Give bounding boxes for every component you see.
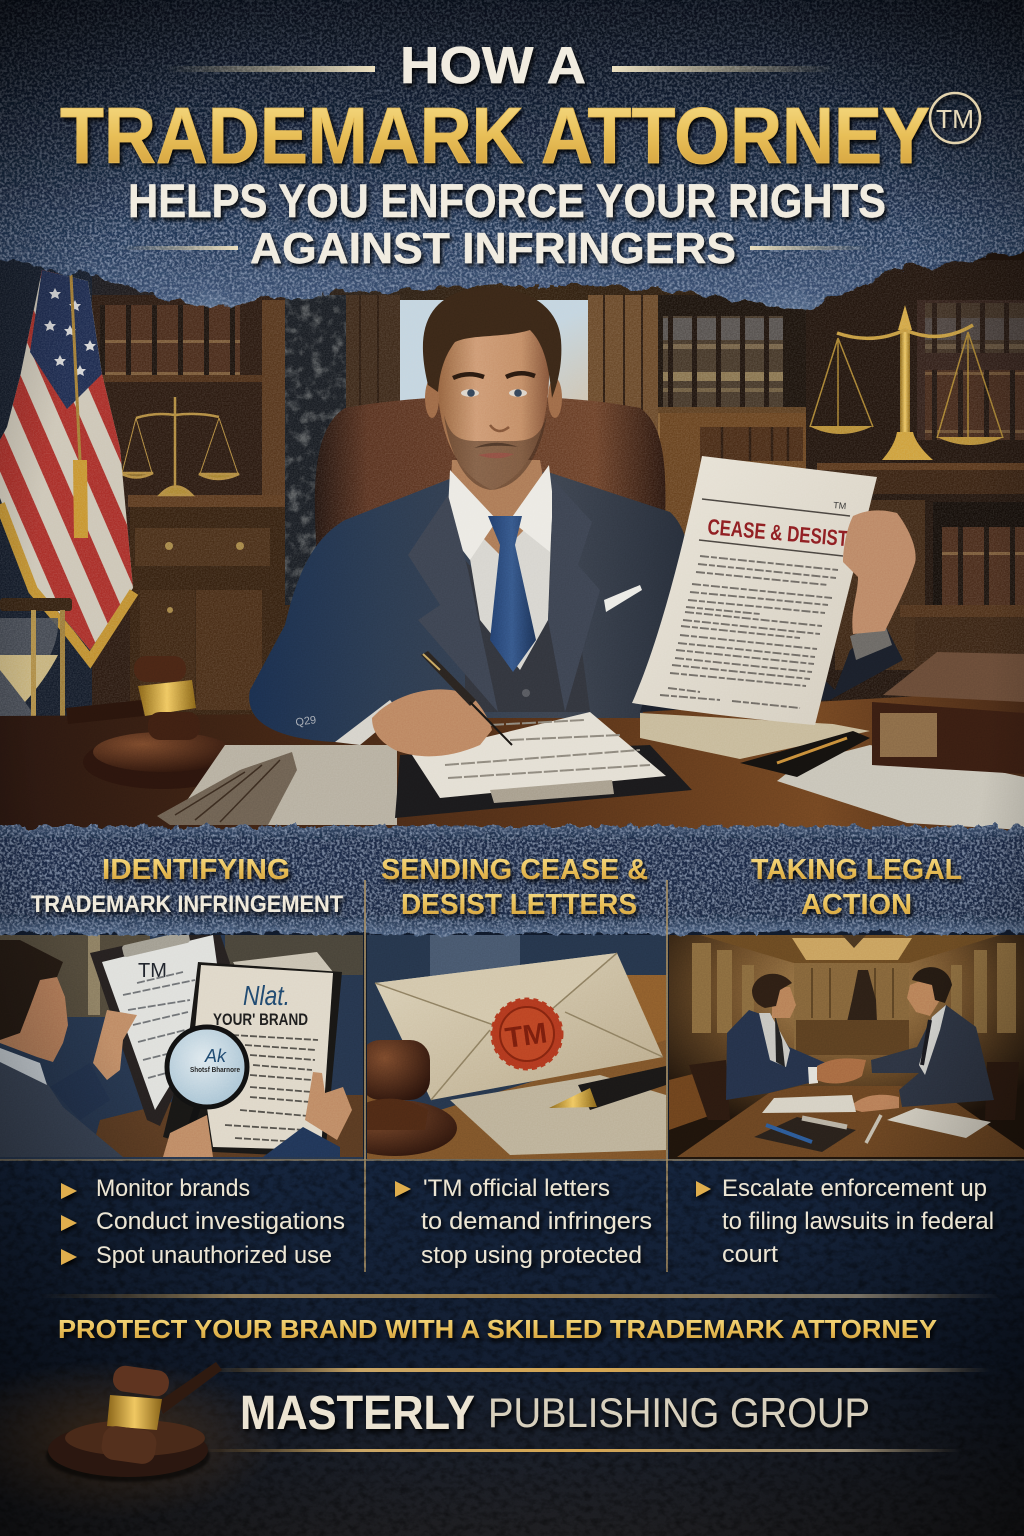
line one: 'TM official letters	[423, 1175, 610, 1202]
lower rule right	[750, 246, 868, 250]
flag tassel	[71, 275, 88, 538]
right bookcase	[806, 240, 1024, 720]
back sheet	[233, 952, 332, 972]
back wall panelling	[794, 963, 909, 1050]
man's hair	[0, 940, 63, 1040]
column heading: identifying trademark infringement	[31, 854, 343, 918]
heading line two: TRADEMARK INFRINGEMENT	[31, 891, 343, 918]
letter TM mark: TM	[833, 500, 847, 511]
clipboard	[395, 712, 692, 818]
line two: to filing lawsuits in federal	[722, 1208, 994, 1235]
hand holding letter	[843, 510, 916, 634]
document heading: YOUR' BRAND	[213, 1010, 308, 1029]
moustache	[474, 443, 518, 448]
right chair	[985, 1062, 1019, 1120]
chandelier	[842, 935, 866, 948]
bullet list: identifying	[61, 1175, 345, 1269]
your brand document	[163, 962, 342, 1157]
banner top shade	[0, 0, 1024, 235]
line one: Escalate enforcement up	[722, 1175, 987, 1202]
window	[398, 300, 590, 440]
flag fringe	[0, 504, 134, 660]
large gavel	[66, 656, 243, 789]
pen	[549, 1066, 666, 1110]
title line: trademark attorney: TRADEMARK ATTORNEY	[60, 91, 930, 180]
brand words: publishing group: PUBLISHING GROUP	[488, 1389, 870, 1436]
ears	[425, 378, 439, 418]
table papers	[762, 1095, 991, 1138]
left bookcase	[92, 295, 300, 715]
small brass scales	[120, 397, 239, 495]
upper rule right	[612, 66, 837, 72]
clipboard TM mark: TM	[138, 960, 167, 982]
lapels	[408, 478, 600, 712]
desk tray with pen	[754, 1117, 856, 1152]
magnified text: Shotsf Bharnore	[190, 1067, 240, 1074]
american flag	[0, 270, 138, 669]
judges bench	[796, 1020, 909, 1055]
pen	[421, 651, 512, 745]
line three: stop using protected	[421, 1242, 642, 1269]
neck	[450, 460, 548, 555]
right hand and sleeve	[263, 1072, 352, 1157]
panel 1 illustration: identifying infringement	[0, 925, 363, 1160]
mouth	[478, 453, 514, 458]
bullet one: Monitor brands	[96, 1175, 250, 1202]
lower section background	[0, 1150, 1024, 1536]
man with documents	[0, 940, 137, 1157]
column dividers	[365, 880, 667, 1272]
lower rule left	[120, 246, 238, 250]
line three: court	[722, 1241, 778, 1268]
hero background: law office	[0, 252, 1024, 716]
title line: helps you enforce your rights: HELPS YOU ENFORCE YOUR RIGHTS	[128, 174, 886, 227]
top title banner	[0, 0, 1024, 310]
torn edge fringe	[0, 0, 1024, 310]
cease and desist letter	[632, 456, 877, 725]
bullet list: cease and desist	[395, 1175, 652, 1269]
pocket square	[604, 585, 642, 612]
panel 2 illustration: cease and desist envelope	[367, 935, 666, 1159]
left cuff	[335, 700, 400, 745]
trademark badge	[930, 93, 980, 143]
left dark wall	[0, 240, 92, 730]
left counter	[669, 1070, 726, 1130]
column heading: taking legal action	[751, 854, 962, 921]
bullet arrow	[395, 1181, 411, 1197]
large brass scales	[809, 305, 1004, 460]
jacket	[249, 472, 692, 742]
wax seal	[492, 999, 562, 1069]
section heading band	[0, 826, 1024, 1160]
hair	[423, 287, 561, 398]
table pen	[866, 1115, 881, 1143]
gavel	[333, 1040, 457, 1156]
warm glow behind footer gavel	[0, 1360, 280, 1520]
bullet two: Conduct investigations	[96, 1208, 345, 1235]
footer gavel icon	[46, 1362, 222, 1482]
torn blue band	[0, 826, 1024, 935]
envelope	[375, 953, 663, 1100]
left chair	[689, 1060, 730, 1120]
shirt	[462, 510, 552, 670]
footer mottling	[0, 1160, 1024, 1536]
footer rule below brand	[200, 1449, 960, 1452]
attorney figure	[249, 287, 903, 745]
stack of folders	[640, 713, 870, 759]
bullet arrow	[696, 1181, 711, 1197]
shirt collar	[447, 465, 553, 560]
hourglass	[0, 598, 76, 788]
heading line two: DESIST LETTERS	[401, 889, 637, 921]
heading line two: ACTION	[801, 889, 912, 921]
brand name	[240, 1387, 870, 1440]
panel frame rule	[0, 1159, 1024, 1161]
upper rule left	[165, 66, 375, 72]
trademark badge: TM	[936, 104, 974, 134]
clipboard with TM	[90, 925, 230, 1126]
letter body lines	[660, 556, 838, 708]
ceiling	[700, 935, 1000, 963]
call to action tagline: PROTECT YOUR BRAND WITH A SKILLED TRADEMARK ATTORNEY	[58, 1314, 937, 1344]
eyebrows	[453, 373, 535, 378]
letter heading: CEASE & DESIST	[707, 514, 850, 551]
vest	[465, 560, 590, 712]
column heading: sending cease and desist letters	[381, 854, 648, 921]
man's left hand	[93, 1010, 137, 1080]
man's lower hand	[163, 1115, 213, 1157]
papers on desk left	[157, 745, 397, 825]
desk and attorney foreground	[0, 287, 1024, 832]
flag stars	[44, 288, 96, 376]
bullet three: Spot unauthorized use	[96, 1242, 332, 1269]
centre bookshelf	[658, 295, 808, 563]
title text	[60, 37, 980, 273]
window glow	[470, 300, 810, 640]
footer rule above brand	[200, 1368, 990, 1372]
nose	[490, 425, 509, 431]
man's suit	[0, 1058, 123, 1157]
magnifying glass	[164, 1024, 250, 1110]
footer rule upper	[40, 1294, 1000, 1298]
magnified logo: Ak	[204, 1046, 227, 1066]
curtains	[346, 295, 658, 445]
bullet arrows	[61, 1183, 77, 1265]
panel 3 illustration: taking legal action	[669, 935, 1024, 1160]
desk	[0, 690, 1024, 832]
bullet list: legal action	[696, 1175, 994, 1268]
sheet beneath envelope	[450, 1075, 666, 1155]
heading line one: SENDING CEASE &	[381, 854, 648, 886]
wax seal TM: TM	[503, 1017, 549, 1055]
pen tray and right papers	[740, 731, 1024, 830]
left man	[726, 974, 826, 1100]
leather book	[872, 652, 1024, 774]
sleeve buttons: Q29	[295, 714, 317, 729]
hero grain	[0, 260, 1024, 830]
man's collar	[0, 1048, 47, 1085]
far arm	[640, 560, 903, 712]
writing hand	[372, 689, 492, 756]
heading line one: TAKING LEGAL	[751, 854, 962, 886]
brand word: masterly: MASTERLY	[240, 1387, 475, 1440]
mottled wall panel	[285, 295, 347, 605]
handshake	[817, 1058, 866, 1083]
cuff	[850, 624, 892, 660]
necktie	[488, 516, 536, 672]
vest button	[522, 689, 530, 697]
title line: against infringers: AGAINST INFRINGERS	[250, 224, 736, 273]
eyes	[461, 389, 527, 397]
man's sleeve	[50, 1063, 110, 1120]
table	[677, 1086, 1024, 1157]
hand on paper	[849, 1095, 899, 1112]
man's face	[0, 977, 68, 1062]
right man	[871, 967, 994, 1107]
statue	[847, 970, 877, 1022]
leather chair	[315, 396, 665, 700]
title line: how a: HOW A	[400, 37, 586, 95]
head	[437, 319, 549, 490]
stubble beard	[444, 415, 547, 490]
heading line one: IDENTIFYING	[102, 854, 290, 886]
document logo script: Nlat.	[243, 980, 290, 1011]
columns	[692, 943, 1016, 1033]
line two: to demand infringers	[421, 1208, 652, 1235]
